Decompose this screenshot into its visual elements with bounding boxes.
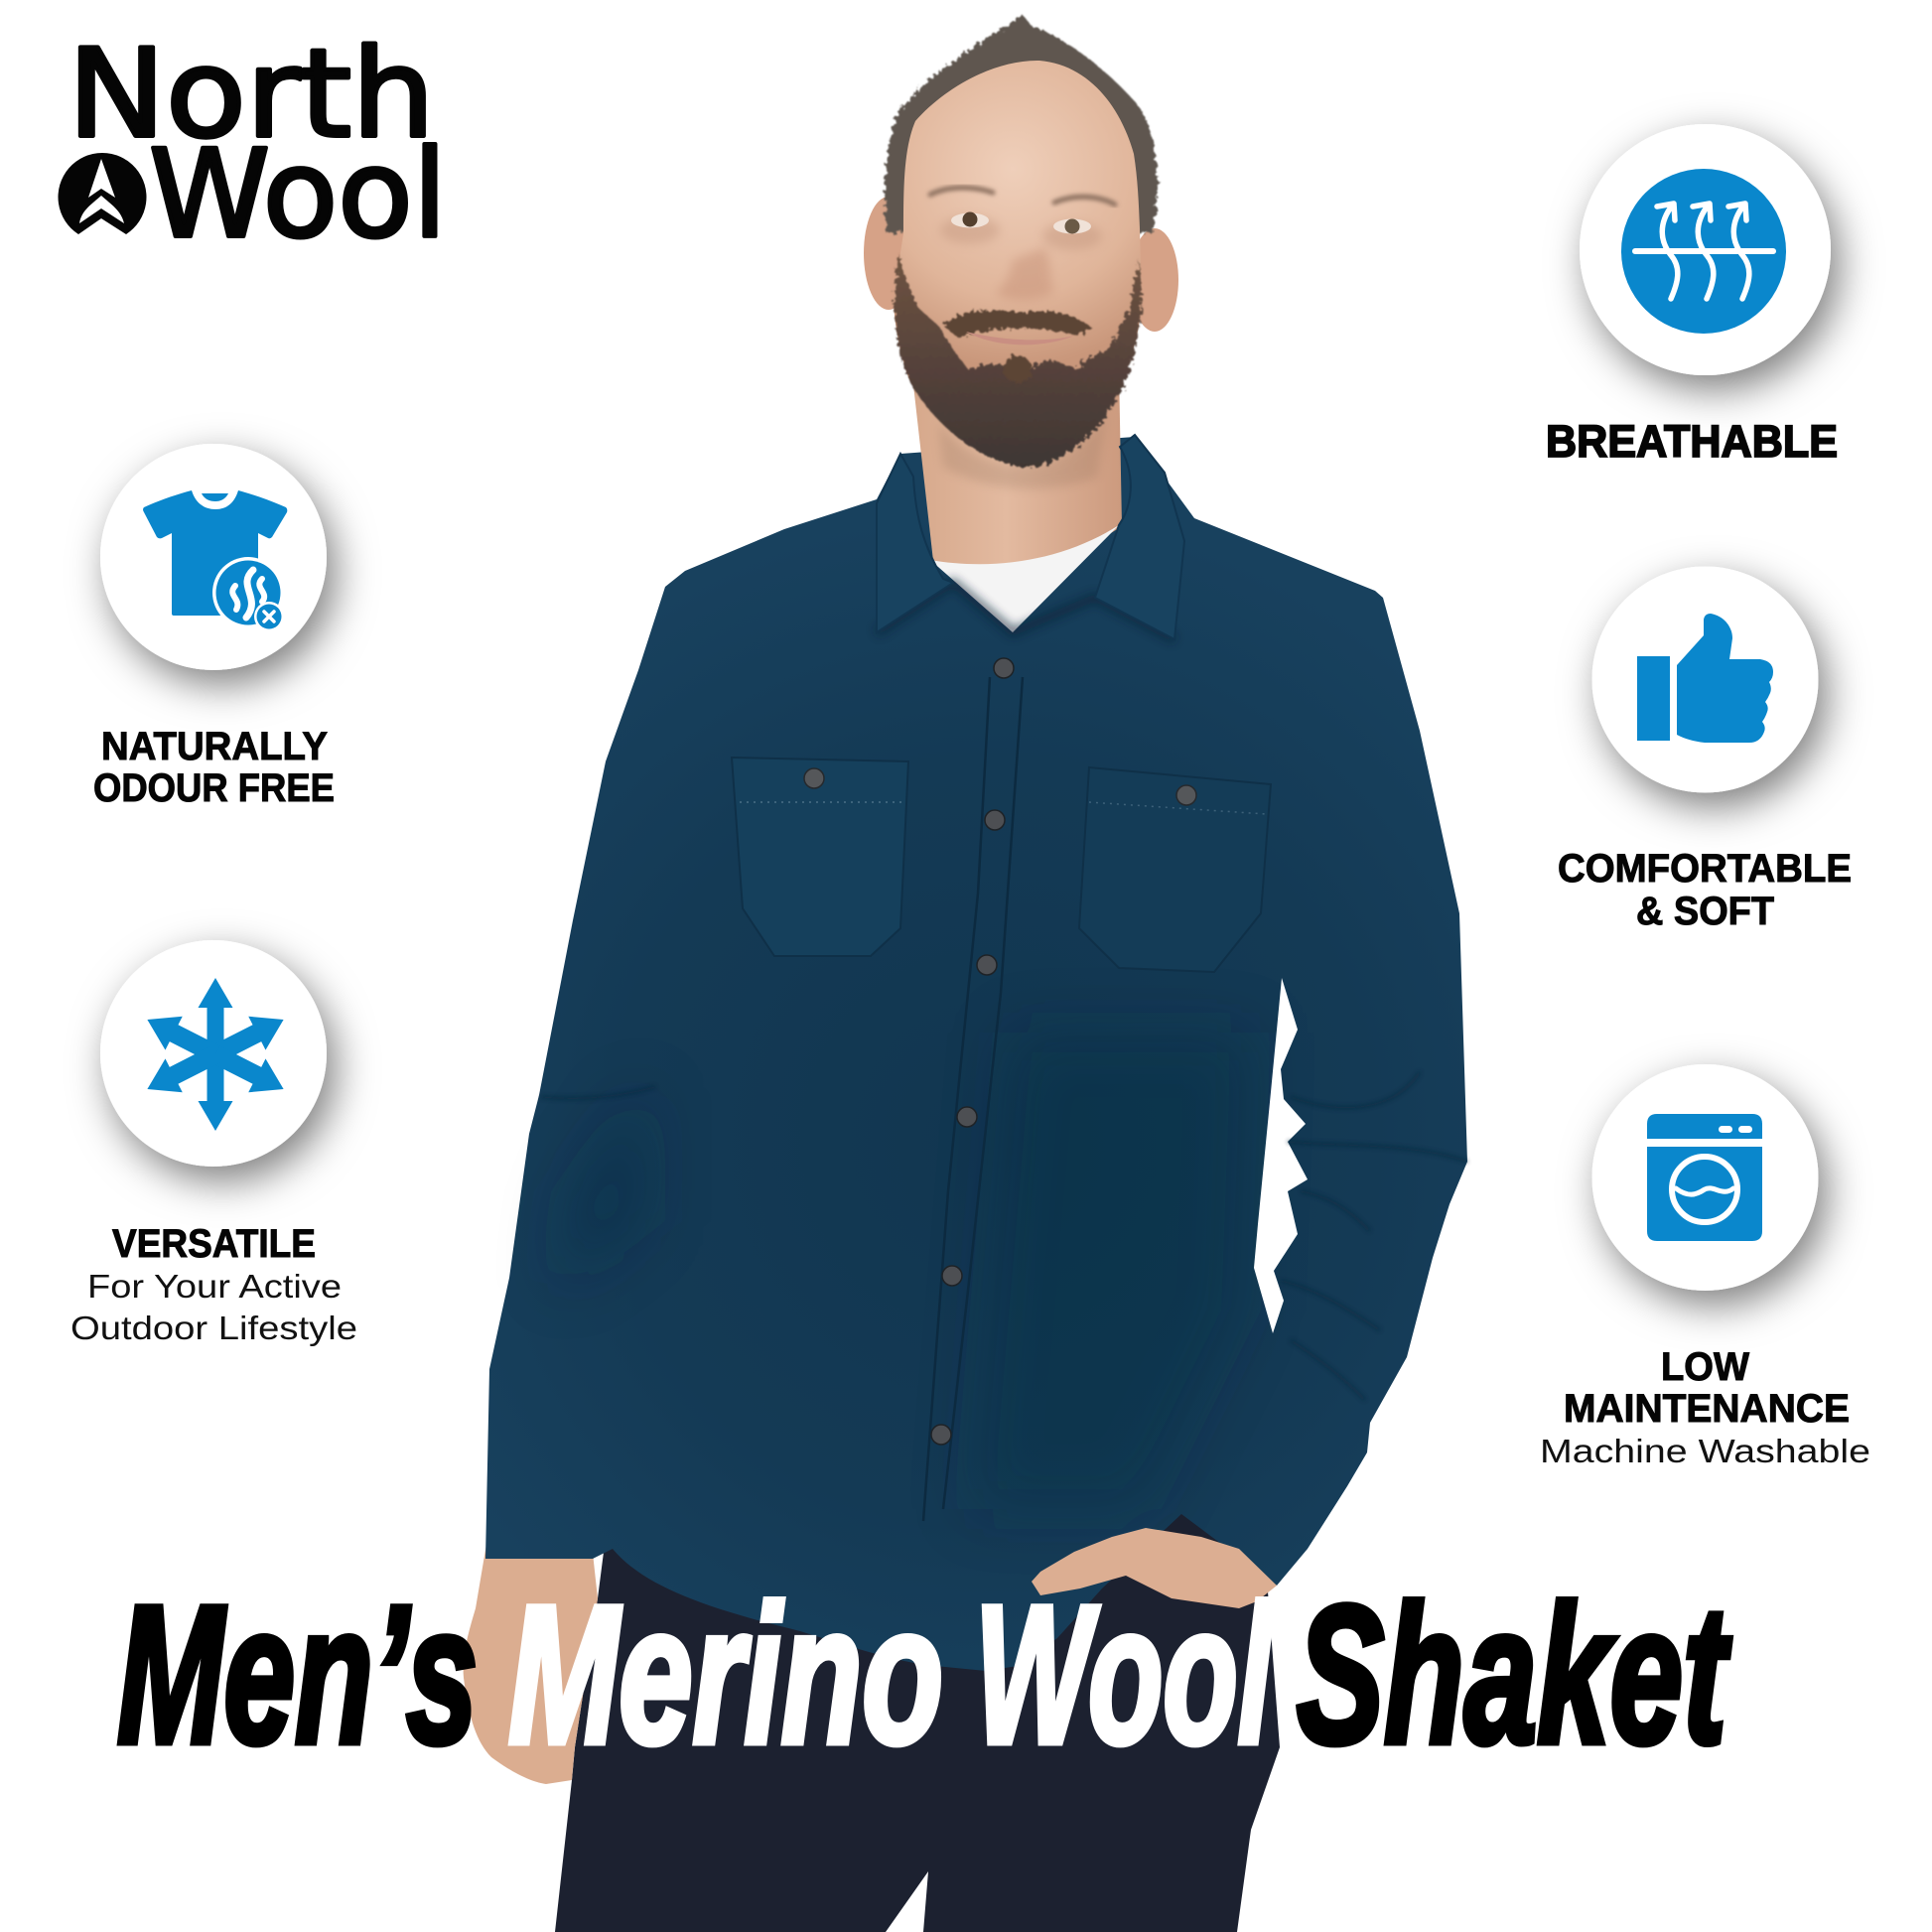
shirt shading — [556, 1033, 1251, 1509]
logo wordmark: North: North — [68, 24, 435, 166]
trousers — [555, 1489, 1280, 1932]
pocket snaps — [804, 768, 1196, 805]
label: MAINTENANCE — [1564, 1387, 1850, 1431]
label: COMFORTABLE — [1558, 847, 1852, 891]
feature: naturally odour free — [93, 444, 335, 810]
shirt body — [485, 437, 1467, 1671]
head — [864, 15, 1178, 468]
label: & SOFT — [1636, 890, 1774, 933]
label: VERSATILE — [112, 1222, 316, 1266]
eye shading — [940, 216, 1102, 250]
badge circle — [1592, 566, 1819, 792]
title: Men’s — [117, 1565, 478, 1784]
feature: breathable — [1546, 124, 1838, 467]
badge circle — [1592, 1064, 1819, 1291]
badge circle — [100, 940, 327, 1167]
mouth — [966, 332, 1074, 345]
white undershirt — [930, 525, 1119, 632]
logo wordmark: Wool: Wool — [149, 124, 447, 265]
badge circle — [100, 444, 327, 670]
left pocket — [732, 758, 908, 956]
label: BREATHABLE — [1546, 416, 1838, 467]
model photo illustration — [464, 15, 1467, 1932]
icon: compass arrow — [58, 153, 146, 234]
logo: North Wool — [58, 42, 437, 240]
nose shadow — [996, 248, 1054, 301]
hair — [885, 15, 1158, 233]
label: Outdoor Lifestyle — [70, 1310, 357, 1346]
shirt collar — [877, 435, 1184, 639]
title: Merino — [508, 1565, 943, 1784]
feature: versatile — [70, 940, 357, 1346]
neck — [911, 367, 1122, 596]
beard — [894, 253, 1142, 468]
label: Machine Washable — [1540, 1433, 1870, 1469]
label — [70, 1222, 357, 1346]
icon: washing machine — [1647, 1114, 1762, 1241]
right hand — [1032, 1528, 1277, 1608]
right pocket — [1079, 767, 1271, 972]
sleeve creases — [541, 1072, 1467, 1400]
icon: breathable fabric — [1621, 169, 1786, 334]
eyes — [951, 212, 1091, 234]
left hand — [464, 1544, 598, 1784]
icon: thumbs up — [1637, 614, 1773, 743]
face — [894, 61, 1142, 460]
title — [117, 1565, 1731, 1784]
front snaps — [931, 658, 1014, 1445]
label — [93, 725, 335, 810]
title: Shaket — [1297, 1565, 1731, 1784]
label: For Your Active — [87, 1268, 342, 1305]
label — [1540, 1345, 1870, 1469]
title: Wool — [975, 1565, 1274, 1784]
badge circle — [1580, 124, 1831, 375]
feature: low maintenance — [1540, 1064, 1870, 1469]
ears — [864, 197, 913, 310]
arm gap — [1254, 978, 1308, 1333]
label: ODOUR FREE — [93, 766, 335, 810]
feature: comfortable and soft — [1558, 566, 1852, 933]
label: LOW — [1661, 1345, 1749, 1389]
eyebrows — [930, 188, 1115, 205]
label: NATURALLY — [101, 725, 328, 768]
icon: t-shirt with odour cross — [143, 490, 287, 631]
icon: six-way arrows snowflake — [139, 978, 292, 1131]
neck stubble — [938, 412, 1107, 488]
placket — [923, 677, 1023, 1521]
label — [1558, 847, 1852, 933]
moustache — [943, 311, 1092, 338]
soul patch — [1004, 355, 1032, 383]
